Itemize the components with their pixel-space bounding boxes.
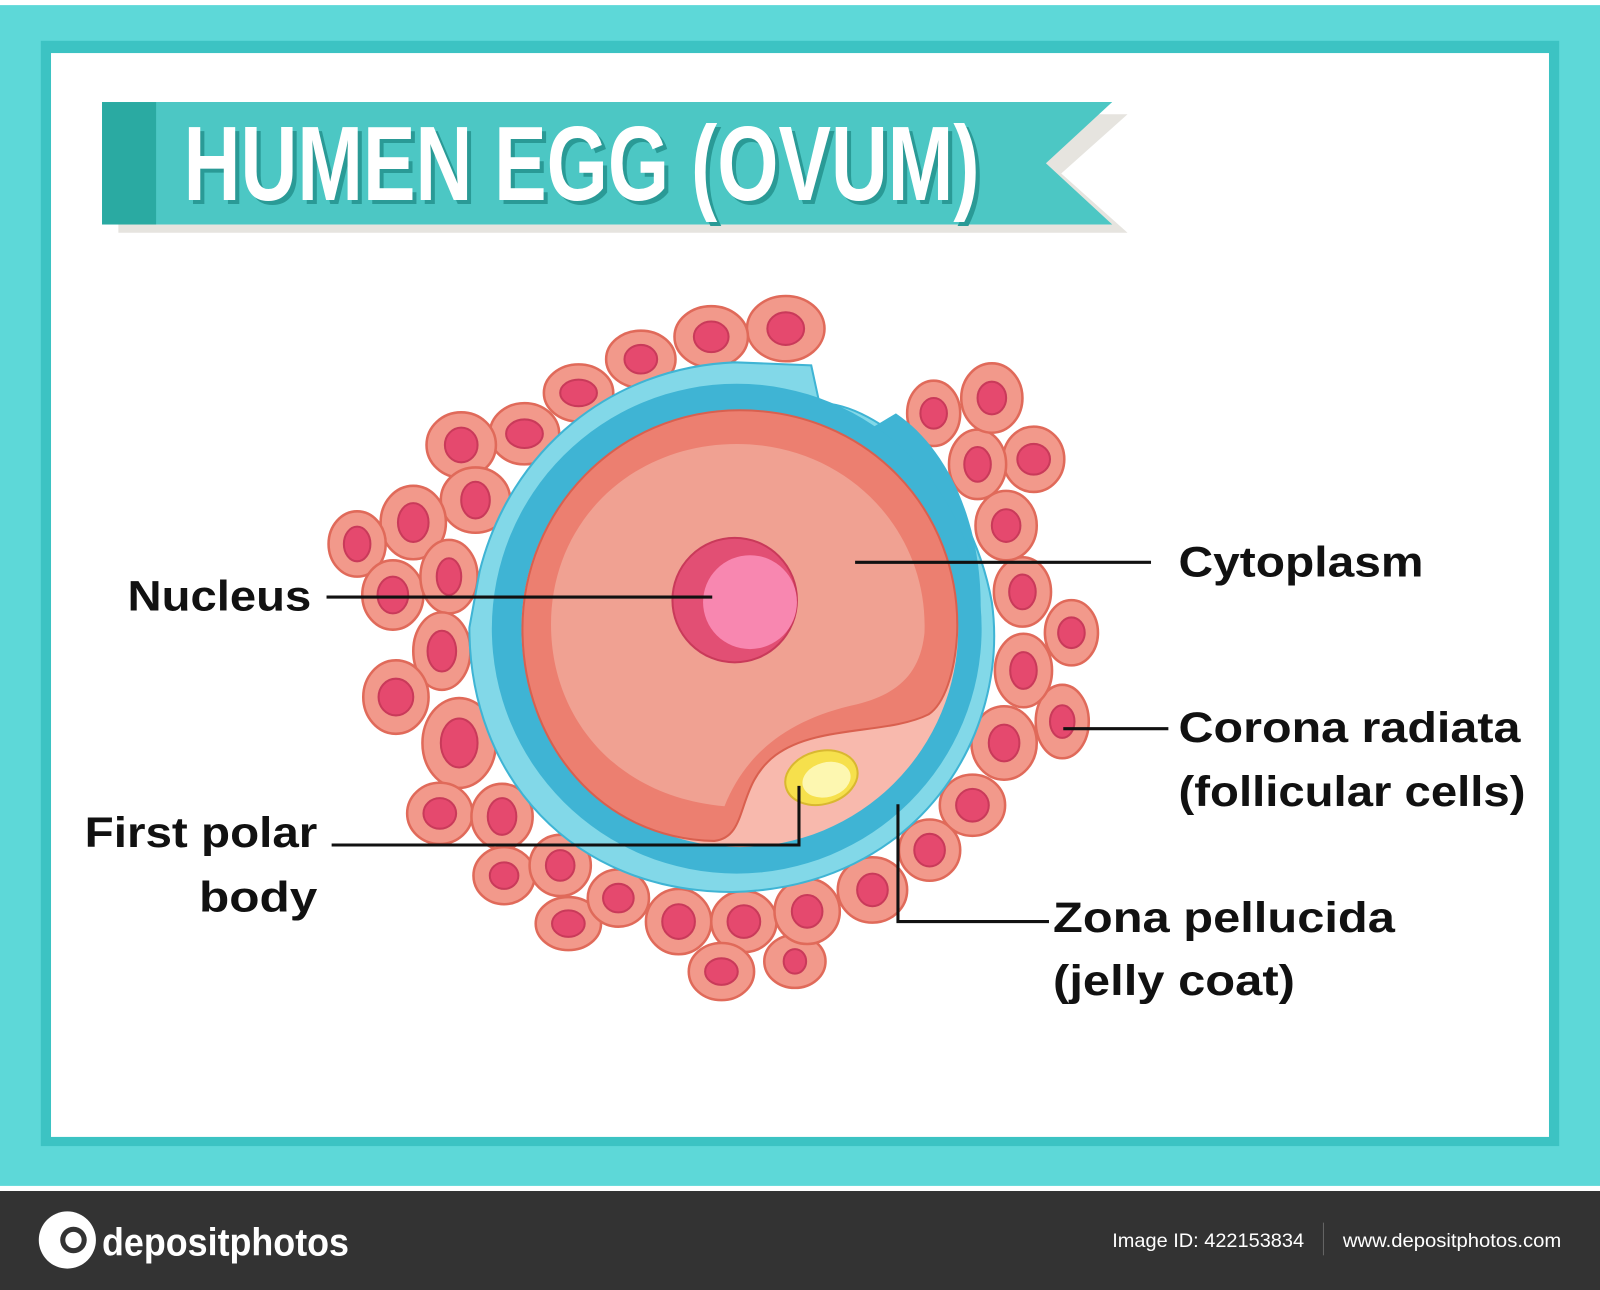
label: first polar body <box>85 809 318 921</box>
label: nucleus: Nucleus <box>128 572 311 620</box>
label: corona radiata <box>1179 704 1526 816</box>
labels <box>85 539 1526 1005</box>
leader lines <box>327 562 1168 922</box>
nucleus <box>672 538 797 662</box>
label: first polar body: First polar <box>85 809 318 857</box>
label: corona radiata: (follicular cells) <box>1179 768 1526 816</box>
zona pellucida <box>469 362 994 892</box>
footer: Image ID: 422153834 <box>1112 1230 1304 1252</box>
label: zona pellucida <box>1053 894 1396 1005</box>
corona radiata cells <box>329 296 1098 1000</box>
label: cytoplasm: Cytoplasm <box>1179 539 1423 587</box>
icon: camera logo <box>39 1211 96 1269</box>
footer: www.depositphotos.com <box>1342 1230 1561 1252</box>
cytoplasm <box>522 410 957 841</box>
label: zona pellucida: Zona pellucida <box>1053 894 1396 942</box>
title ribbon: HUMEN EGG (OVUM) <box>184 105 980 223</box>
label: zona pellucida: (jelly coat) <box>1053 957 1295 1005</box>
footer text: depositphotos <box>102 1221 349 1264</box>
diagram: ovum <box>329 296 1098 1000</box>
label: first polar body: body <box>199 873 318 921</box>
label: corona radiata: Corona radiata <box>1179 704 1522 752</box>
polar body <box>779 743 864 813</box>
footer <box>0 1191 1600 1290</box>
title: HUMEN EGG (OVUM) <box>188 109 984 227</box>
